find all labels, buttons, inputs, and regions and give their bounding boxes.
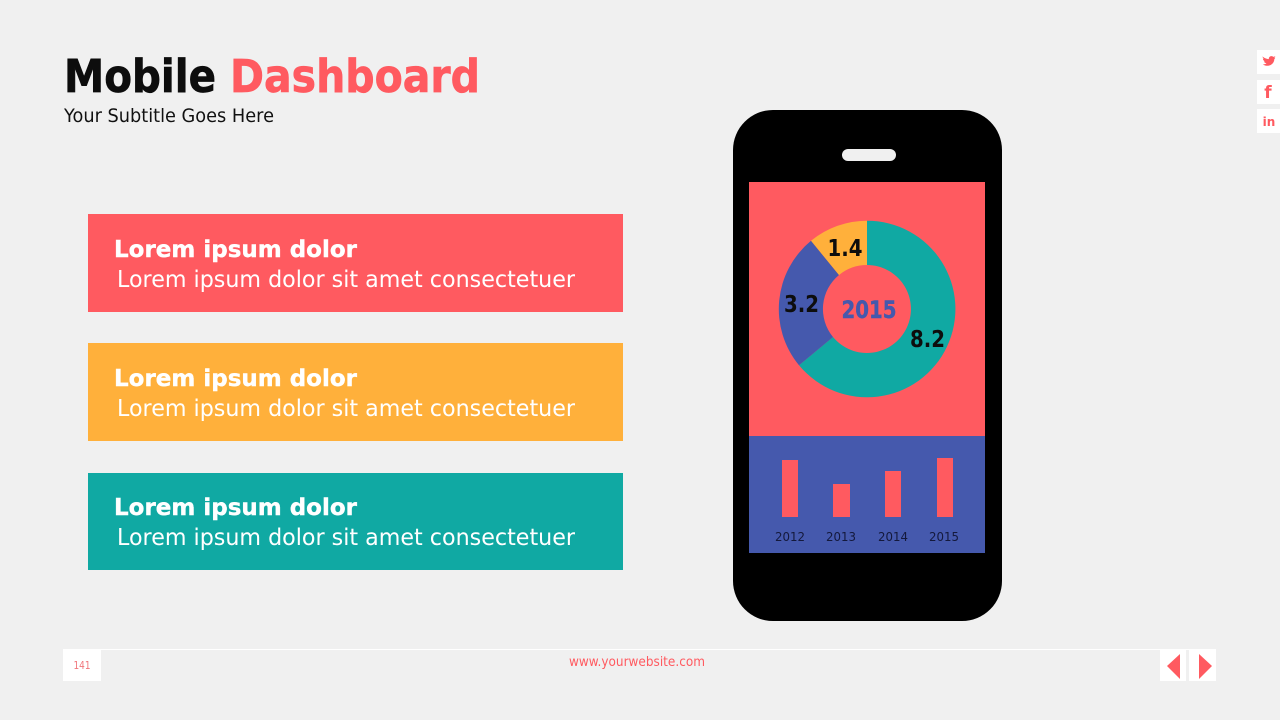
icon: facebook xyxy=(1257,80,1280,104)
subtitle: Your Subtitle Goes Here xyxy=(63,105,274,127)
screen: bar panel xyxy=(749,436,985,553)
segment: 1.4 xyxy=(811,221,867,275)
title xyxy=(64,50,480,103)
icon: linkedin: in xyxy=(1263,115,1275,129)
icon: linkedin xyxy=(1257,109,1280,133)
item heading: Lorem ipsum dolor xyxy=(114,493,357,521)
phone body xyxy=(733,110,1002,621)
axis labels: 2015 xyxy=(929,530,959,544)
value 8.2: 8.2 xyxy=(910,327,945,353)
item text: Lorem ipsum dolor sit amet consectetuer xyxy=(117,525,576,551)
axis labels: 2014 xyxy=(878,530,908,544)
bar 2013 xyxy=(833,484,850,517)
screen: donut panel xyxy=(749,182,985,436)
axis labels: 2013 xyxy=(826,530,856,544)
phone speaker xyxy=(842,149,896,161)
panel: orange item xyxy=(88,343,623,441)
value 1.4: 1.4 xyxy=(828,236,862,262)
arrow: previous xyxy=(1160,649,1186,681)
axis labels xyxy=(775,530,959,544)
axis labels: 2012 xyxy=(775,530,805,544)
website url: www.yourwebsite.com xyxy=(569,655,705,670)
icon: twitter xyxy=(1257,50,1280,74)
item heading: Lorem ipsum dolor xyxy=(114,364,357,392)
item heading: Lorem ipsum dolor xyxy=(114,235,357,263)
arrow: next xyxy=(1189,649,1216,681)
bar 2014 xyxy=(885,471,901,517)
segment: 8.2 xyxy=(799,221,955,397)
donut chart xyxy=(779,221,955,397)
panel: red item xyxy=(88,214,623,312)
footer line xyxy=(63,649,1216,650)
panel: teal item xyxy=(88,473,623,570)
icon: facebook: f xyxy=(1264,83,1272,103)
item text: Lorem ipsum dolor sit amet consectetuer xyxy=(117,267,576,293)
segment: 3.2 xyxy=(779,241,839,365)
page number: 141 xyxy=(74,659,90,672)
bar 2012 xyxy=(782,460,798,517)
value 3.2: 3.2 xyxy=(784,292,819,318)
item text: Lorem ipsum dolor sit amet consectetuer xyxy=(117,396,576,422)
title: Dashboard xyxy=(230,50,480,103)
bar chart xyxy=(775,458,959,544)
page number xyxy=(63,649,101,681)
title: Mobile xyxy=(64,50,216,103)
donut centre label: 2015 xyxy=(842,296,896,324)
bar 2015 xyxy=(937,458,953,517)
phone xyxy=(733,110,1002,621)
